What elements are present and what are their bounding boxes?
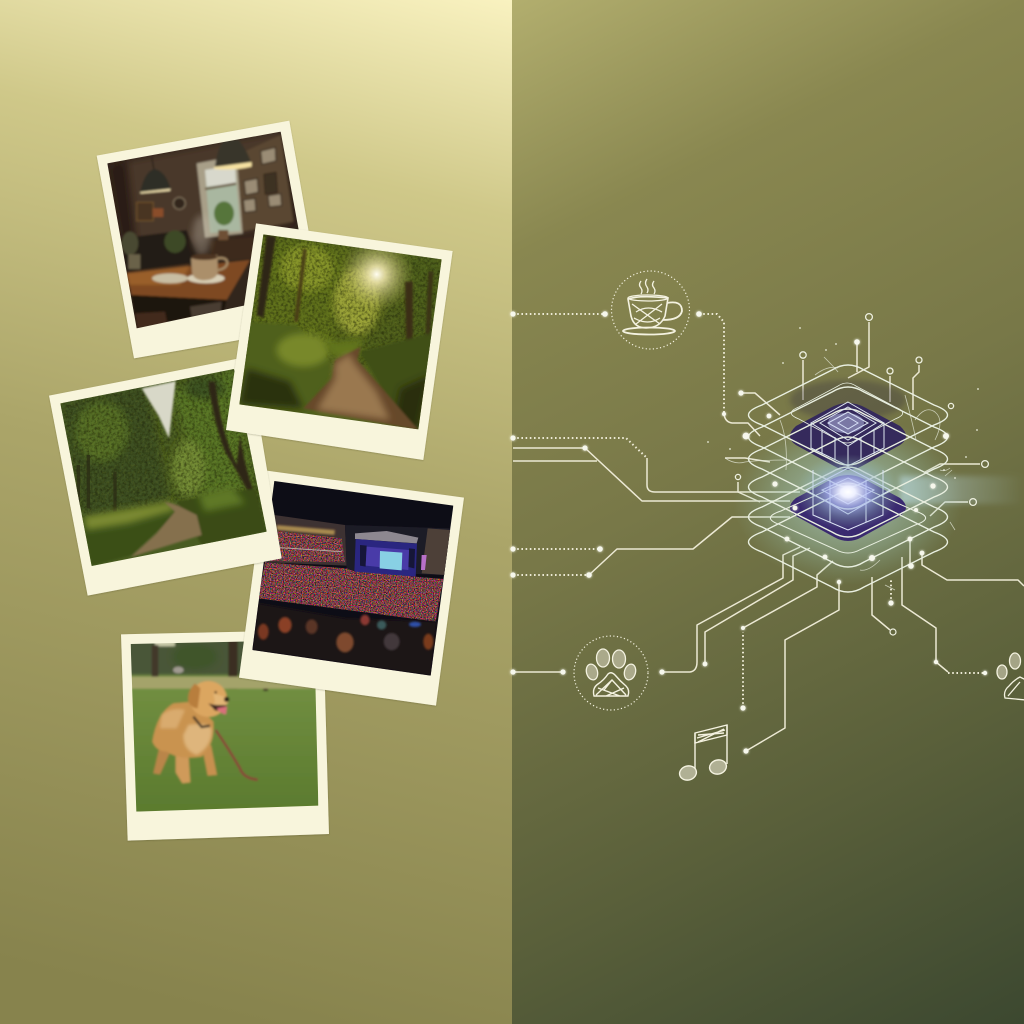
foliage highlights: [254, 254, 437, 362]
circuit traces: [513, 314, 1024, 751]
trace end nodes: [510, 311, 987, 754]
ring node near right paw: [890, 629, 896, 635]
photo: green woodland trail: [49, 357, 282, 596]
panel: right background: [512, 0, 1024, 1024]
lower core grid: [806, 468, 890, 530]
tree trunks: [78, 455, 115, 512]
trunks, undergrowth and trail: [239, 235, 437, 430]
upper purple chip: [790, 403, 906, 470]
photo frame: [121, 630, 329, 841]
sun burst: [341, 247, 414, 311]
isometric neural chip stack: [707, 314, 1024, 606]
connection nodes: [738, 339, 949, 606]
main crowd texture: [259, 562, 444, 622]
lens flare: [900, 476, 1024, 504]
photo: night concert crowd: [239, 471, 464, 706]
undergrowth and trail: [82, 487, 267, 566]
icon: paw in dotted circle: [574, 636, 648, 710]
icon: coffee cup in dotted circle: [612, 271, 690, 349]
icon: paw partly cropped at right edge: [997, 653, 1024, 700]
photo frame: [239, 471, 464, 706]
foliage texture: [237, 232, 447, 365]
foliage texture: [58, 368, 268, 525]
icon: music notes: [678, 725, 728, 782]
dark haze above the upper chip: [790, 380, 906, 420]
photo frame: [49, 357, 282, 596]
panel: left background: [0, 0, 512, 1024]
scattered speckles: [707, 327, 979, 479]
ring nodes: [735, 314, 988, 505]
sky gap: [142, 381, 176, 438]
upper nested core: [811, 402, 884, 466]
teal haze behind the chip: [733, 415, 963, 585]
foliage highlights: [64, 395, 256, 514]
central light burst: [796, 454, 900, 530]
stand crowd texture: [269, 531, 345, 562]
lower purple chip: [790, 475, 906, 541]
photo: golden retriever in park: [121, 630, 329, 841]
fine traces around the chip: [725, 357, 955, 590]
photo: sunlit forest path: [226, 223, 453, 460]
photo: cafe with coffee cup: [97, 121, 325, 358]
outer layer outlines: [748, 365, 948, 592]
photo frame: [97, 121, 325, 358]
textured centre of the upper core: [828, 413, 864, 433]
photo frame: [226, 223, 453, 460]
